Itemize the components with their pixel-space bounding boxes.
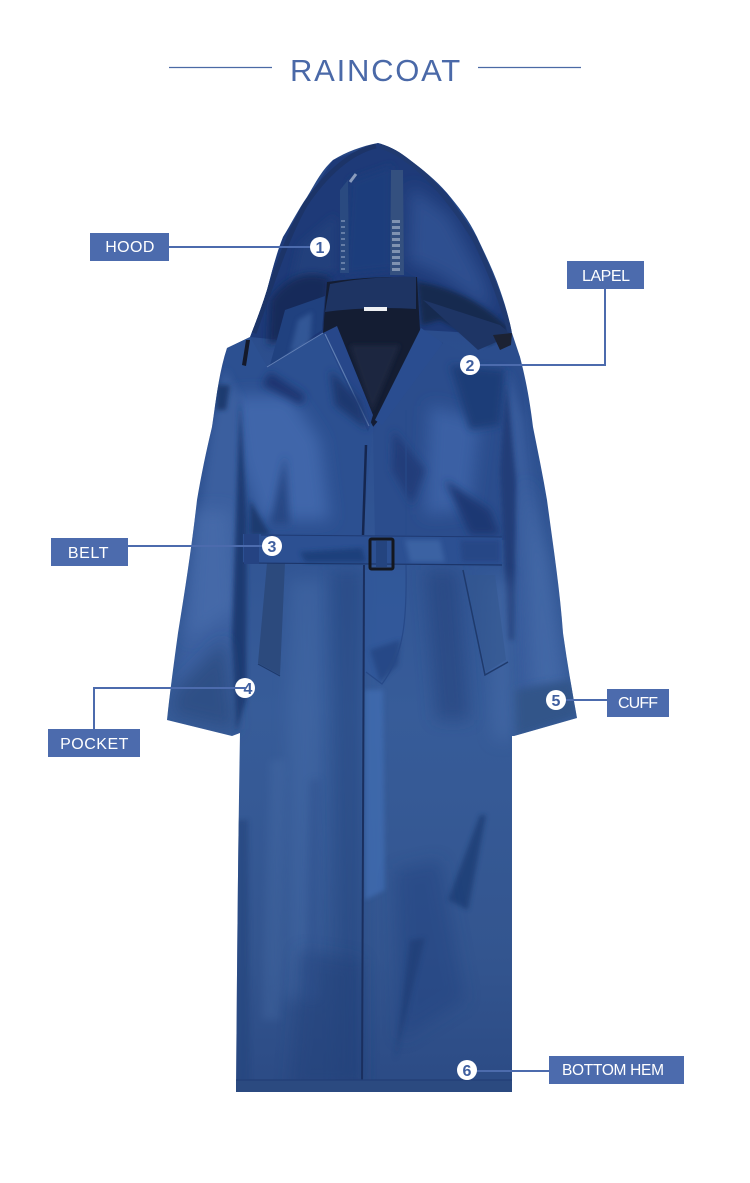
sleeves bbox=[170, 370, 577, 736]
right pocket bbox=[463, 570, 508, 675]
callout: bottom hem bbox=[457, 1056, 684, 1084]
callout: cuff: 5 bbox=[552, 693, 561, 710]
callout: belt bbox=[51, 536, 282, 566]
callout: bottom hem: BOTTOM HEM bbox=[562, 1062, 664, 1079]
left pocket bbox=[258, 563, 285, 676]
hood bbox=[250, 143, 512, 365]
raincoat illustration bbox=[150, 130, 590, 1100]
callout: cuff bbox=[546, 689, 669, 717]
callout: bottom hem: 6 bbox=[463, 1063, 472, 1080]
callout: hood bbox=[90, 233, 330, 261]
callout: pocket: POCKET bbox=[60, 736, 129, 753]
callout: belt: 3 bbox=[268, 539, 277, 556]
callout: lapel: 2 bbox=[466, 358, 475, 375]
callout: hood: HOOD bbox=[105, 239, 155, 256]
shoulder toggle bbox=[242, 340, 250, 366]
title: RAINCOAT bbox=[290, 53, 462, 88]
shoulders, chest and lapels bbox=[226, 326, 520, 432]
callout: pocket bbox=[48, 678, 255, 757]
callout: lapel: LAPEL bbox=[582, 268, 630, 285]
skirt folds bbox=[236, 565, 512, 1093]
callout: belt: BELT bbox=[68, 545, 109, 562]
callout: cuff: CUFF bbox=[618, 695, 658, 712]
belt bbox=[243, 534, 502, 569]
callout: lapel bbox=[460, 261, 644, 375]
hood toggle bbox=[493, 333, 512, 350]
callout: pocket: 4 bbox=[244, 681, 253, 698]
callout: hood: 1 bbox=[316, 240, 325, 257]
collar and inner lining bbox=[323, 277, 443, 432]
folds on chest bbox=[232, 365, 505, 535]
